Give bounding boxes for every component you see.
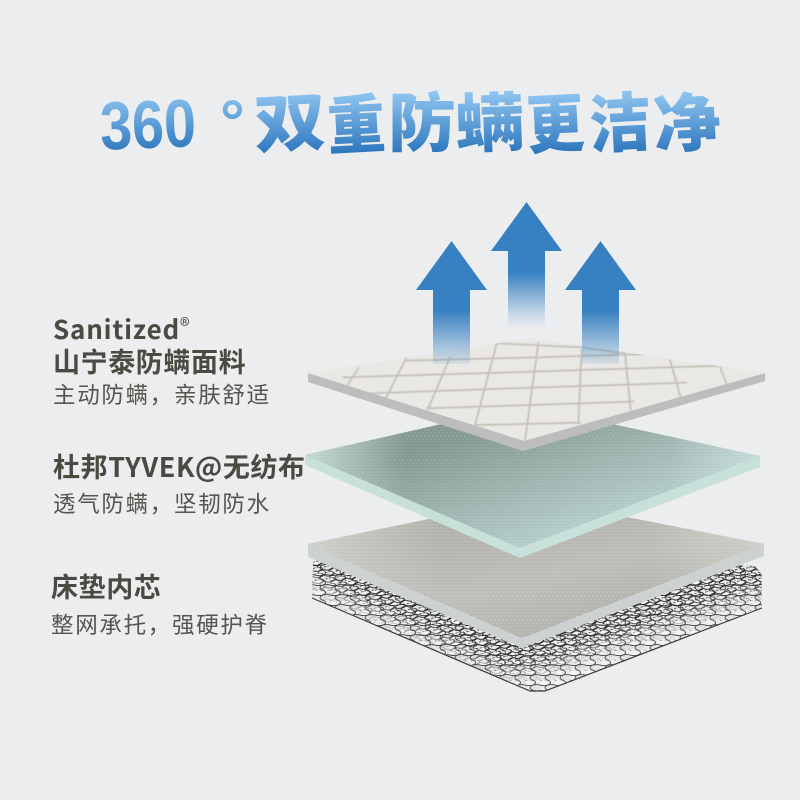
arrow left (416, 241, 487, 364)
Tyvek non-woven layer (305, 405, 760, 558)
title (99, 71, 723, 168)
description: Tyvek: 透气防螨，坚韧防水 (53, 487, 271, 519)
heading: fabric name: 山宁泰防螨面料 (53, 341, 246, 380)
quilted Sanitized fabric layer (308, 338, 765, 451)
mattress core top panel (308, 498, 764, 648)
description: core: 整网承托，强硬护脊 (51, 608, 269, 640)
description: fabric: 主动防螨，亲肤舒适 (53, 378, 271, 410)
title: 双 (252, 71, 328, 167)
title: 洁 (587, 71, 653, 167)
quilting seams (343, 343, 730, 441)
title: 更 (524, 73, 586, 167)
arrow center (491, 202, 562, 330)
label: mattress core (51, 566, 269, 640)
heading: core: 床垫内芯 (51, 566, 161, 605)
spring core layer (312, 556, 762, 692)
heading: Sanitized: Sanitized® (53, 310, 190, 347)
title: ° (220, 88, 245, 157)
heading: Tyvek: 杜邦TYVEK@无纺布 (53, 446, 306, 485)
title: 重 (325, 74, 387, 168)
label: Sanitized fabric (53, 310, 271, 410)
label: Tyvek layer (53, 446, 306, 519)
arrow right (565, 241, 636, 364)
title: 净 (651, 71, 723, 167)
title: 防 (388, 73, 456, 165)
title: 360 (99, 85, 197, 165)
title: 螨 (453, 72, 527, 166)
